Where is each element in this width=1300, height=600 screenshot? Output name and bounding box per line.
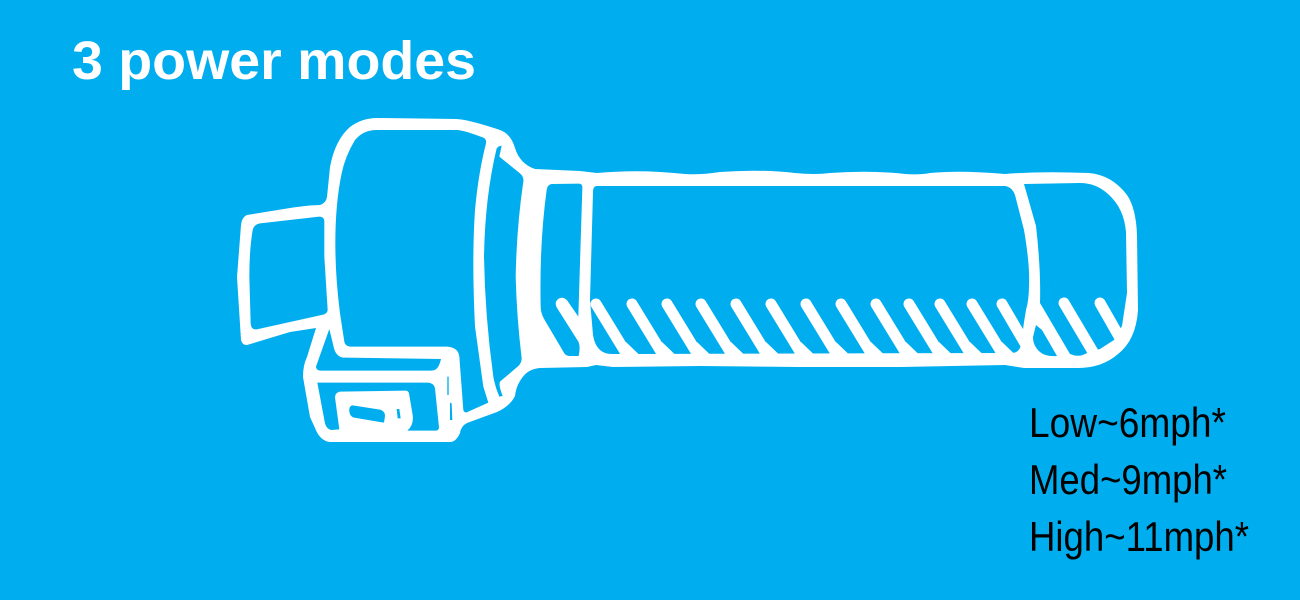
throttle housing opening [335,130,488,412]
high speed: High~11mph* [1029,513,1249,560]
band opening [540,184,582,356]
grip silhouette [237,118,1138,442]
main barrel opening [590,186,1029,354]
lower box opening [317,383,439,431]
low speed: Low~6mph* [1029,399,1226,446]
small divider opening [1033,325,1057,356]
kickstand tab opening [249,217,328,329]
grip cut-outs [249,130,582,431]
barrel hatch lines [596,304,1026,358]
hatch left stub [596,304,629,358]
box edge slit lower [450,403,452,420]
hatch lines row [632,304,1026,358]
speed modes text [1029,399,1249,560]
end cap hatch lines [1064,303,1120,357]
collar ring opening [484,146,523,397]
display small slit [397,409,401,418]
icon: throttle grip [237,118,1138,442]
medium speed: Med~9mph* [1029,456,1227,503]
display window [349,405,385,423]
title: 3 power modes [72,31,476,91]
box edge slit upper [447,377,449,395]
end cap opening [1024,183,1127,356]
triangle under housing [316,329,441,371]
hatch base fillets [626,342,1014,354]
